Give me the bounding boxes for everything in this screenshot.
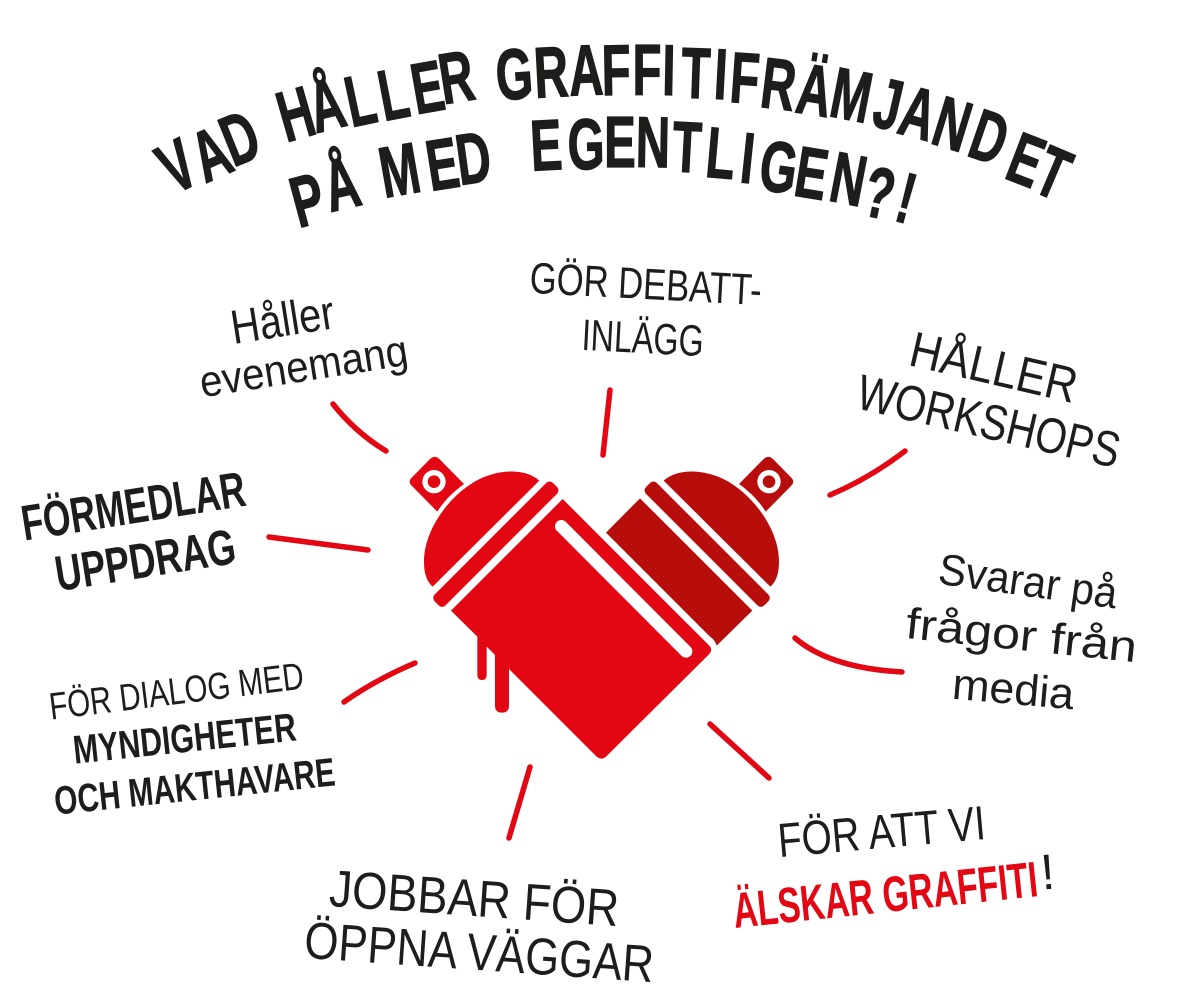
text: jobbar för öppna väggar [303, 860, 656, 994]
title: D [209, 94, 271, 182]
text: svarar på frågor från media: Svarar på [935, 545, 1121, 618]
right band [643, 480, 772, 609]
title: Ä [791, 48, 838, 133]
title: T [680, 33, 712, 114]
title: ! [888, 157, 924, 239]
text: svarar på frågor från media: frågor från [904, 599, 1139, 672]
text: för dialog med myndigheter och makthavare: OCH MAKTHAVARE [52, 750, 337, 824]
text: för att vi älskar graffiti: ÄLSKAR GRAFFITI [730, 851, 1040, 939]
left band [431, 480, 560, 609]
right can body [606, 498, 752, 646]
right dome [664, 471, 779, 587]
text: håller workshops: WORKSHOPS [852, 364, 1126, 479]
title: E [790, 131, 834, 215]
arrow: workshops [830, 451, 905, 495]
title: R [532, 31, 570, 113]
title: Å [316, 141, 367, 227]
text: för att vi älskar graffiti: FÖR ATT VI [776, 797, 988, 868]
arrow: uppdrag [269, 537, 368, 550]
title: N [635, 102, 671, 183]
text: håller evenemang [196, 286, 411, 407]
title: D [451, 116, 496, 200]
text: för dialog med myndigheter och makthavare: MYNDIGHETER [71, 705, 298, 773]
title: Å [300, 62, 353, 148]
title: G [493, 33, 535, 116]
arrow: media [795, 638, 902, 672]
text: svarar på frågor från media: media [950, 660, 1077, 719]
title: R [757, 42, 801, 126]
title: L [338, 58, 383, 142]
title: F [601, 30, 631, 111]
arrow: älskar graffiti [710, 724, 769, 778]
title: A [179, 110, 243, 198]
left nozzle ring [422, 470, 446, 493]
title: A [891, 70, 945, 156]
title: V [145, 123, 210, 209]
title: E [997, 117, 1055, 203]
text: förmedlar uppdrag [17, 461, 249, 602]
arrow: debatt [603, 390, 610, 455]
title: N [924, 81, 980, 168]
text: svarar på frågor från media [904, 545, 1139, 719]
title: G [755, 125, 803, 210]
title: D [960, 94, 1019, 181]
title: F [632, 30, 662, 110]
text: gör debatt-inlägg: INLÄGG [581, 311, 705, 366]
text: jobbar för öppna väggar: ÖPPNA VÄGGAR [303, 912, 656, 994]
title: E [604, 102, 636, 182]
text: håller workshops: HÅLLER [905, 321, 1083, 414]
title: ? [857, 151, 902, 235]
title [145, 30, 1082, 243]
title: N [824, 137, 873, 222]
left can body with drips [451, 499, 711, 759]
text: håller evenemang: Håller [227, 286, 338, 355]
text: för dialog med myndigheter och makthavare [47, 656, 337, 824]
title: M [373, 127, 426, 213]
title: E [405, 45, 450, 129]
title: L [372, 52, 415, 136]
title: I [737, 118, 759, 199]
text: förmedlar uppdrag: FÖRMEDLAR [17, 461, 249, 552]
text: för dialog med myndigheter och makthavare: FÖR DIALOG MED [47, 656, 306, 729]
title: F [728, 37, 762, 119]
left dome [424, 471, 539, 587]
arrow: öppna väggar [509, 767, 530, 838]
title: J [867, 62, 910, 146]
title: H [268, 71, 323, 157]
title: G [567, 104, 605, 185]
icon: spray can heart [410, 457, 793, 759]
text: för att vi älskar graffiti: ! [1038, 844, 1057, 901]
title: A [568, 30, 605, 111]
title: P [282, 157, 333, 243]
title: L [703, 112, 739, 194]
arrow: evenemang [333, 404, 386, 451]
title: M [824, 52, 879, 138]
title: I [712, 34, 730, 115]
text: gör debatt-inlägg [529, 254, 763, 366]
text: för att vi älskar graffiti [730, 797, 1057, 939]
text: gör debatt-inlägg: GÖR DEBATT- [529, 254, 763, 315]
arrow: myndigheter [344, 663, 415, 702]
title: E [528, 104, 564, 186]
title: T [670, 106, 703, 188]
title: E [420, 122, 464, 206]
title: T [1024, 130, 1082, 216]
left nozzle [410, 457, 464, 512]
text: jobbar för öppna väggar: JOBBAR FÖR [328, 860, 621, 938]
text: håller workshops [852, 321, 1126, 479]
right nozzle ring [757, 470, 781, 493]
right nozzle [739, 457, 793, 512]
title: R [433, 35, 480, 120]
text: förmedlar uppdrag: UPPDRAG [51, 518, 240, 602]
highlight on can [561, 526, 686, 651]
title: I [662, 30, 676, 110]
text: håller evenemang: evenemang [196, 326, 411, 407]
